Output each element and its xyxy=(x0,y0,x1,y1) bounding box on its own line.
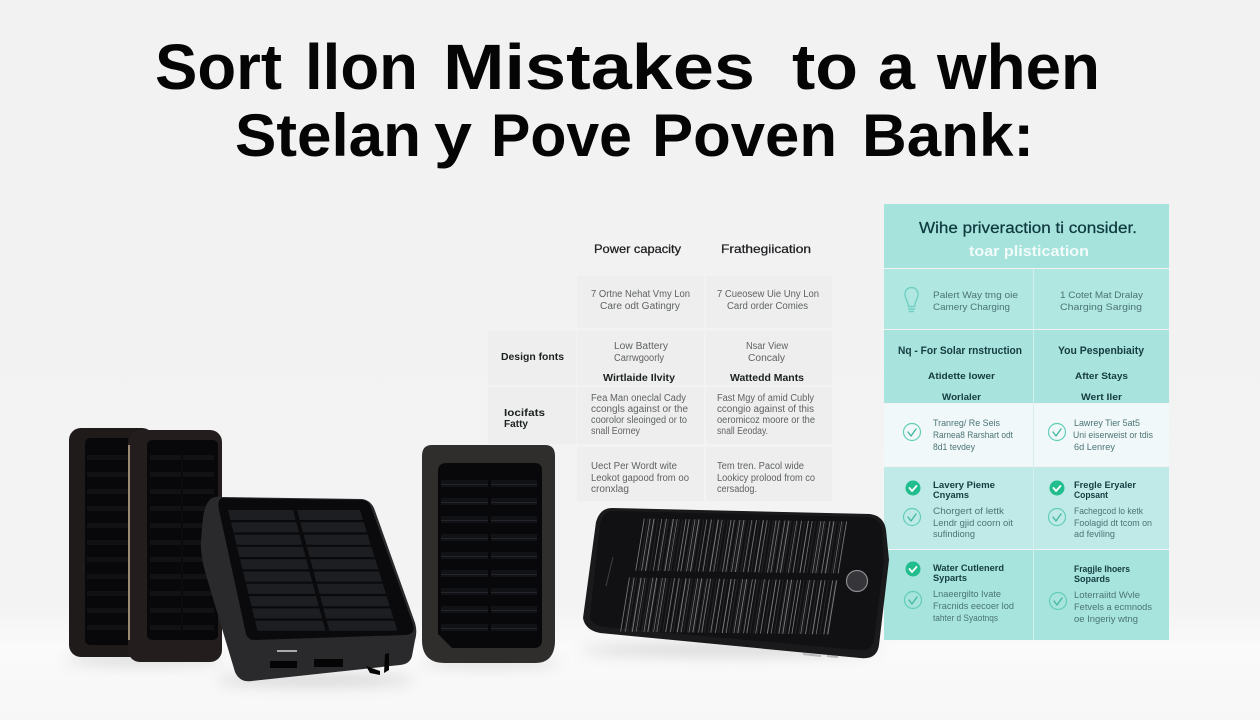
card row 5: Fetvels a ecmnods xyxy=(1074,602,1152,613)
title: Stelan xyxy=(235,102,421,169)
card row 5: Water Cutlenerd xyxy=(933,563,1004,574)
table row 2: Wirtlaide Ilvity xyxy=(603,372,675,384)
card heading: toar plistication xyxy=(969,243,1089,260)
device: upright solar power bank xyxy=(422,445,555,663)
solar stripes xyxy=(625,545,844,607)
table row 2: Wattedd Mants xyxy=(730,372,804,384)
table row 4 xyxy=(591,461,815,495)
icon: light bulb xyxy=(905,288,918,312)
table row 3: coorolor sleoinged or to xyxy=(591,415,687,426)
title xyxy=(155,31,1100,169)
card row 5 xyxy=(904,562,1152,625)
table row 4: cronxlag xyxy=(591,484,629,495)
device: back-left solar power bank xyxy=(69,428,154,657)
device: second solar power bank xyxy=(128,430,222,662)
table row 1 xyxy=(591,289,819,312)
card row 1: Charging Sarging xyxy=(1060,302,1142,313)
solar cells xyxy=(228,510,397,631)
card row 4: Fregle Eryaler xyxy=(1074,480,1136,491)
table row 3: snall Eeoday. xyxy=(717,426,768,437)
table row 2 xyxy=(501,341,804,384)
title: llon xyxy=(305,31,418,103)
card row 3 xyxy=(904,418,1153,453)
table row 3: Fatty xyxy=(504,418,528,430)
card row 2: You Pespenbiaity xyxy=(1058,345,1145,357)
card row 2: Atidette lower xyxy=(928,371,995,382)
table row 2: Nsar View xyxy=(746,341,789,352)
card row 4: Lavery Pieme xyxy=(933,480,995,491)
table column headings: Frathegiication xyxy=(721,242,811,256)
table row 1: 7 Cueosew Uie Uny Lon xyxy=(717,289,819,300)
card row 5: oe Ingeriy wtng xyxy=(1074,614,1138,625)
table row 4: Uect Per Wordt wite xyxy=(591,461,677,472)
table row 1: Care odt Gatingry xyxy=(600,301,680,312)
ports xyxy=(270,650,389,675)
table row 2: Design fonts xyxy=(501,351,564,363)
card row 5: Lnaeergilto Ivate xyxy=(933,589,1001,600)
card backgrounds xyxy=(884,204,1169,640)
card row 4: Fachegcod lo ketk xyxy=(1074,506,1143,517)
title: Poven xyxy=(652,102,837,169)
title: y xyxy=(434,102,473,169)
card row 1: 1 Cotet Mat Dralay xyxy=(1060,290,1143,301)
table row 3: oeromicoz moore or the xyxy=(717,415,815,426)
table row 4: Leokot gapood from oo xyxy=(591,473,689,484)
card row 3: Lawrey Tier 5at5 xyxy=(1074,418,1140,429)
table column headings xyxy=(594,242,811,256)
card row 2: After Stays xyxy=(1075,371,1128,382)
table row 2: Low Battery xyxy=(614,341,668,352)
card row 4: Chorgert of lettk xyxy=(933,506,1004,517)
card row 2 xyxy=(898,345,1145,403)
card row 5: Fragjle Ihoers xyxy=(1074,564,1130,575)
card row 4: Lendr gjid coorn oit xyxy=(933,518,1013,529)
card row 4: sufindiong xyxy=(933,529,975,540)
device: tilted solar power bank with ports xyxy=(201,497,416,681)
table row 4: cersadog. xyxy=(717,484,757,495)
card row 5: Loterraiitd Wvle xyxy=(1074,590,1140,601)
speaker slot xyxy=(606,557,613,586)
card row 1 xyxy=(933,290,1143,313)
table row 3: snall Eorney xyxy=(591,426,640,437)
card row 4: Copsant xyxy=(1074,490,1109,501)
table row 1: Card order Comies xyxy=(727,301,808,312)
card row 4 xyxy=(904,480,1152,540)
title: Pove xyxy=(491,102,632,169)
card row 3: Tranreg/ Re Seis xyxy=(933,418,1000,429)
card row 3: 8d1 tevdey xyxy=(933,442,975,453)
card row 3: Rarnea8 Rarshart odt xyxy=(933,430,1013,441)
title: Mistakes xyxy=(443,31,755,103)
card row 4: ad feviling xyxy=(1074,529,1115,540)
table row 3: Fast Mgy of amid Cubly xyxy=(717,393,814,404)
device shadows xyxy=(65,644,880,686)
title: Sort xyxy=(155,31,282,103)
bottom ports xyxy=(803,654,838,657)
card row 5: Syparts xyxy=(933,573,967,584)
table row 4: Tem tren. Pacol wide xyxy=(717,461,804,472)
comparison table xyxy=(488,242,832,501)
table row 4: Lookicy prolood from co xyxy=(717,473,815,484)
table row 3: Iocifats xyxy=(504,407,545,419)
title: a xyxy=(878,31,915,103)
card row 1: Palert Way tmg oie xyxy=(933,290,1018,301)
table column headings: Power capacity xyxy=(594,242,681,256)
card row 3: 6d Lenrey xyxy=(1074,442,1115,453)
card row 5: Sopards xyxy=(1074,574,1110,585)
card row 2: Worlaler xyxy=(942,392,981,403)
table row 2: Concaly xyxy=(748,353,785,364)
home button xyxy=(846,570,868,592)
title: Bank: xyxy=(862,102,1034,169)
card row 4: Foolagid dt tcom on xyxy=(1074,518,1152,529)
card row 2: Nq - For Solar rnstruction xyxy=(898,345,1022,357)
table row 3: ccongio against of this xyxy=(717,404,814,415)
table row 2: Carrwgoorly xyxy=(614,353,664,364)
table row 3: Fea Man oneclal Cady xyxy=(591,393,686,404)
card row 3: Uni eiserweist or tdis xyxy=(1073,430,1153,441)
table row 3: ccongls against or the xyxy=(591,404,688,415)
device: phone-shaped solar power bank xyxy=(583,508,889,658)
card heading xyxy=(919,220,1137,260)
panel: teal checklist card xyxy=(884,204,1169,640)
card row 2: Wert Iler xyxy=(1081,392,1122,403)
table row 3 xyxy=(504,393,815,437)
table cell backgrounds xyxy=(488,276,832,501)
card row 5: tahter d Syaotnqs xyxy=(933,613,998,624)
title: when xyxy=(936,31,1100,103)
card heading: Wihe priveraction ti consider. xyxy=(919,220,1137,237)
table row 1: 7 Ortne Nehat Vmy Lon xyxy=(591,289,690,300)
card row 1: Camery Charging xyxy=(933,302,1010,313)
card row 5: Fracnids eecoer lod xyxy=(933,601,1014,612)
card row 4: Cnyams xyxy=(933,490,969,501)
title: to xyxy=(792,31,858,103)
